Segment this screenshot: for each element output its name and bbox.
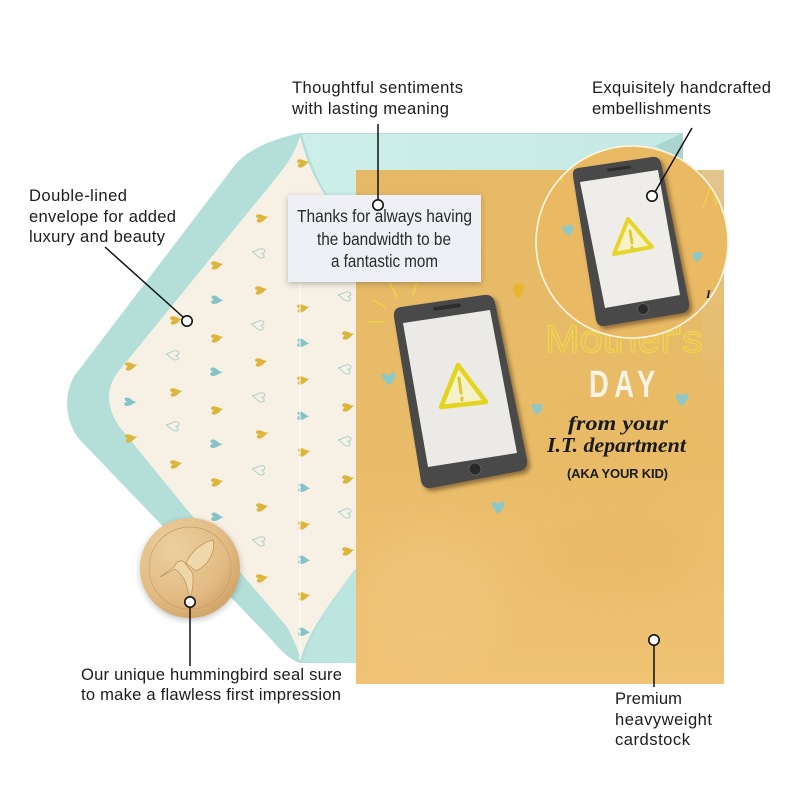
body <box>160 561 193 598</box>
leader line <box>189 607 191 666</box>
card base <box>356 170 724 684</box>
seal inner ring <box>149 527 231 609</box>
callout: cardstock <box>615 635 712 749</box>
sentiment text <box>297 206 472 271</box>
Day: DAY <box>589 364 655 406</box>
label text: embellishments <box>592 99 711 118</box>
label text <box>81 665 342 704</box>
marker <box>647 191 657 201</box>
lens contents <box>558 155 724 326</box>
leader line <box>653 645 655 687</box>
sentiment panel <box>288 195 481 282</box>
envelope top flap <box>302 134 683 195</box>
envelope <box>67 133 683 663</box>
lens hearts <box>562 225 702 262</box>
phone screen <box>403 310 517 467</box>
aka your kid: (AKA YOUR KID) <box>567 466 668 481</box>
label text: luxury and beauty <box>29 227 166 246</box>
envelope corner fold <box>655 133 683 160</box>
wing <box>186 540 214 571</box>
phone button <box>469 463 481 475</box>
lens gold details <box>558 155 724 208</box>
label text <box>291 78 463 118</box>
label text <box>615 689 712 749</box>
card tonal mottling <box>360 390 700 670</box>
envelope lower flap <box>303 568 356 663</box>
envelope outer lining <box>67 133 683 663</box>
card <box>356 170 724 684</box>
callout: double-lined envelope <box>29 186 192 326</box>
lens disc <box>536 146 728 338</box>
magnified embellishment circle <box>536 146 728 338</box>
phone on card <box>394 295 527 488</box>
lens I letter: I <box>705 287 712 301</box>
callout: embellishments <box>592 78 771 201</box>
label text: cardstock <box>615 730 691 749</box>
marker <box>185 597 195 607</box>
label text: envelope for added <box>29 207 176 226</box>
label text: Thoughtful sentiments <box>292 78 463 97</box>
phone body <box>394 295 527 488</box>
sentiment text: a fantastic mom <box>331 251 438 271</box>
label text: with lasting meaning <box>291 99 449 118</box>
I.T. department: I.T. department <box>546 433 687 457</box>
card right edge highlight <box>702 170 724 390</box>
marker <box>182 316 192 326</box>
liner heart pattern <box>124 158 355 660</box>
hummingbird seal <box>140 518 240 618</box>
label text: Premium <box>615 689 682 708</box>
lens phone <box>573 157 689 326</box>
hummingbird emboss <box>160 540 214 598</box>
label text <box>29 186 176 246</box>
marker <box>373 200 383 210</box>
leader line <box>655 128 692 192</box>
label text: heavyweight <box>615 710 712 729</box>
warning triangle <box>441 365 486 407</box>
card greeting text <box>545 319 703 481</box>
sentiment card <box>288 195 481 282</box>
sentiment text: the bandwidth to be <box>317 229 451 249</box>
label text: Double-lined <box>29 186 127 205</box>
sentiment text: Thanks for always having <box>297 206 472 226</box>
label text <box>592 78 771 118</box>
leader line <box>377 124 379 200</box>
label text: to make a flawless first impression <box>81 685 341 704</box>
callout: hummingbird seal <box>81 597 342 704</box>
envelope patterned liner <box>109 136 356 658</box>
from your: from your <box>568 413 668 435</box>
callout: sentiments <box>291 78 463 210</box>
leader line <box>105 247 183 317</box>
label text: Our unique hummingbird seal sure <box>81 665 342 684</box>
gold rays around phone <box>368 283 417 322</box>
label text: Exquisitely handcrafted <box>592 78 771 97</box>
card hearts <box>382 283 688 514</box>
marker <box>649 635 659 645</box>
phone speaker <box>433 303 461 311</box>
seal disc <box>140 518 240 618</box>
Mother's: Mother's <box>545 319 703 361</box>
